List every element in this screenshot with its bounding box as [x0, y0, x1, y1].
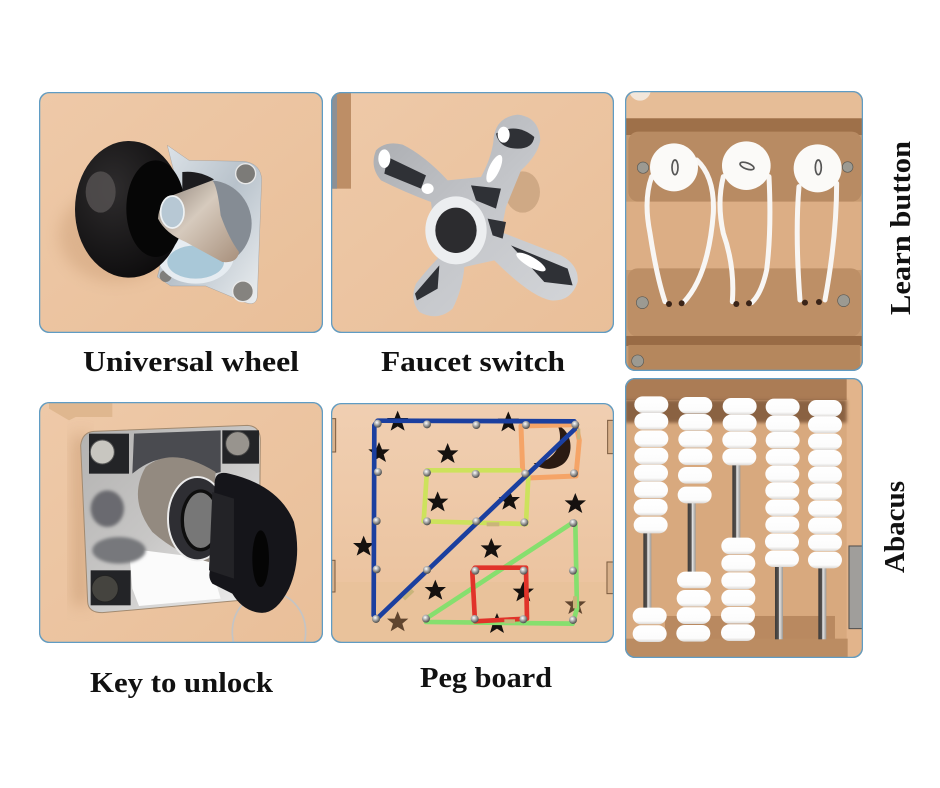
- top wood strip: [625, 90, 865, 118]
- screws: [632, 162, 853, 367]
- panel: faucet switch: [331, 92, 615, 334]
- icon: small screw: [160, 270, 172, 282]
- wheel highlight: [86, 171, 116, 213]
- lock plate: [81, 425, 260, 613]
- lower shadow: [665, 616, 835, 639]
- column 1 beads: [633, 396, 668, 642]
- icon: swivel bright ring: [160, 238, 234, 284]
- icon: rubber wheel: [75, 141, 183, 278]
- rods: [643, 456, 826, 639]
- wood block: [49, 402, 112, 420]
- panel border: [40, 92, 322, 332]
- top shadow: [625, 400, 847, 423]
- pegs: [372, 420, 579, 624]
- label: abacus: Abacus: [879, 481, 911, 573]
- buttons: [650, 141, 842, 192]
- panel: key to unlock: [39, 402, 323, 672]
- clasp: [849, 546, 864, 629]
- icon: swivel dark ring: [212, 180, 252, 256]
- icon: faucet arms: [374, 115, 578, 316]
- icon: bracket arm: [158, 180, 239, 262]
- panel border: [626, 378, 862, 658]
- keyhole ring: [168, 477, 227, 560]
- panel border: [332, 92, 614, 332]
- wheel shadow on wood: [58, 202, 160, 284]
- orange band: [521, 425, 579, 478]
- column 4 beads: [765, 399, 800, 567]
- green band: [426, 523, 577, 624]
- wood middle: [625, 202, 865, 270]
- left metal strip: [331, 95, 337, 189]
- faucet white highlights: [378, 127, 548, 275]
- left wood tab: [331, 92, 351, 189]
- bracket axle: [161, 196, 184, 228]
- lock lower shade: [92, 537, 146, 564]
- icon: bracket gap: [182, 172, 214, 192]
- screws: [90, 440, 114, 464]
- rubber bands: [374, 421, 579, 624]
- dark rail band: [625, 336, 865, 346]
- blue band: [374, 421, 576, 619]
- panel border: [40, 402, 322, 642]
- lace holes: [666, 299, 822, 307]
- side slots: [328, 419, 615, 594]
- column 3 beads: [721, 398, 757, 641]
- lower board shade: [331, 582, 615, 644]
- column 2 beads: [676, 397, 712, 642]
- dark band: [625, 118, 865, 135]
- panel: peg board: [328, 402, 615, 644]
- key head: [209, 473, 297, 613]
- icon: faucet centre hole: [435, 208, 477, 253]
- icon: plate screw bottom: [233, 281, 253, 302]
- upper plate: [628, 132, 862, 202]
- icon: mounting plate: [157, 145, 262, 304]
- top frame: [625, 376, 847, 400]
- stars: [353, 411, 586, 633]
- label: faucet switch: Faucet switch: [381, 346, 565, 378]
- white laces: [647, 160, 837, 303]
- key ring: [232, 592, 306, 672]
- key head hole: [252, 530, 269, 587]
- lock shadow: [72, 435, 89, 605]
- red band: [472, 568, 527, 621]
- key head shine: [209, 492, 234, 579]
- button holes: [672, 160, 821, 175]
- keyhole inner: [182, 491, 219, 550]
- yellow band: [424, 470, 528, 524]
- icon: faucet hub ring: [425, 196, 487, 264]
- label: universal wheel: Universal wheel: [83, 346, 299, 378]
- badge: corner icon: [630, 91, 650, 101]
- corner cutouts: [89, 430, 259, 605]
- bottom rail: [628, 345, 860, 370]
- label: key to unlock: Key to unlock: [90, 667, 274, 699]
- lock mottled shade: [91, 490, 124, 527]
- column 5 beads: [808, 400, 842, 568]
- panel: universal wheel: [39, 92, 323, 334]
- label: learn button: Learn button: [885, 141, 917, 315]
- stem shadow: [505, 171, 540, 213]
- band clips: [402, 429, 580, 623]
- wheel hub: [126, 160, 185, 257]
- lower plate: [628, 268, 861, 337]
- cylinder: [138, 457, 216, 562]
- panel: abacus: [625, 376, 865, 660]
- bottom frame: [625, 639, 848, 660]
- faucet dark reflections: [384, 129, 573, 300]
- brown stars: [387, 594, 586, 631]
- panel border: [626, 92, 862, 370]
- lock dark top shading: [132, 430, 221, 474]
- icon: plate screw top: [236, 164, 256, 184]
- panel: learn button: [625, 79, 865, 372]
- icon: swivel inner blue: [167, 245, 224, 279]
- moon cutout: [534, 425, 571, 469]
- lock bright reflection: [129, 549, 221, 606]
- panel border: [332, 404, 614, 642]
- label: peg board: Peg board: [420, 662, 552, 694]
- right frame: [847, 376, 865, 660]
